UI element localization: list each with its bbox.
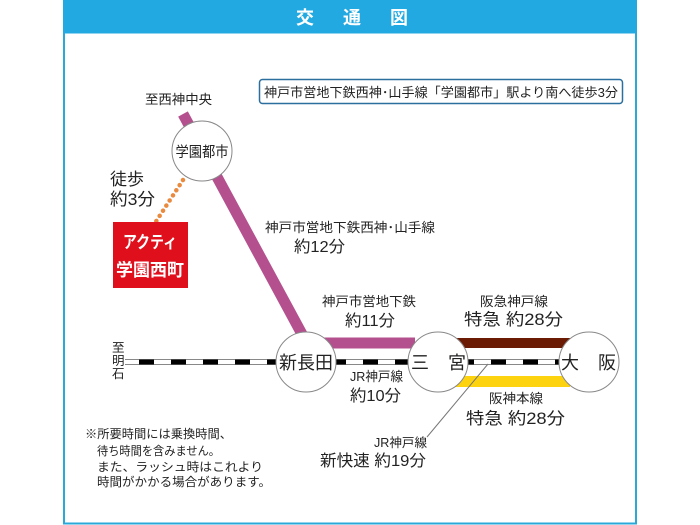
label: Seishin-Yamate 12 min <box>265 220 435 256</box>
label: Hanshin 28 min <box>466 391 566 428</box>
label: Hankyu 28 min: 特急 約28分 <box>464 310 564 329</box>
purple line: Seishin-Yamate <box>183 114 415 343</box>
label: JR rapid 19 min: JR神戸線 <box>374 435 427 450</box>
title: 交 通 図 <box>296 8 408 28</box>
station: Shin-Nagata <box>276 332 336 392</box>
label: to Akashi: 石 <box>112 367 125 381</box>
label: Hanshin 28 min: 特急 約28分 <box>466 409 566 428</box>
label: JR 10 min <box>350 369 403 405</box>
note: travel time disclaimer <box>85 427 271 489</box>
label: subway 11 min: 神戸市営地下鉄 <box>322 294 416 309</box>
station: Osaka: 大 <box>561 353 579 373</box>
label: Hankyu 28 min: 阪急神戸線 <box>480 294 548 309</box>
red box: Acty Gakuen-nishimachi: アクティ <box>123 233 177 252</box>
label: Seishin-Yamate 12 min: 神戸市営地下鉄西神･山手線 <box>265 220 435 235</box>
label: to Akashi: 至 <box>112 341 125 355</box>
label: Seishin-Yamate 12 min: 約12分 <box>294 238 345 256</box>
header bar <box>63 0 637 34</box>
walking route dotted <box>155 180 183 223</box>
label: subway 11 min: 約11分 <box>345 312 395 330</box>
label: walk 3 minutes <box>110 170 155 209</box>
label: to Seishin-chuo: 至西神中央 <box>145 92 212 107</box>
note: travel time disclaimer: 待ち時間を含みません。 <box>97 444 220 458</box>
label: walk 3 minutes: 徒歩 <box>110 170 144 189</box>
label: JR rapid 19 min <box>320 435 427 470</box>
station: Gakuen-toshi: 学園都市 <box>176 144 228 161</box>
label: JR 10 min: 約10分 <box>350 387 401 405</box>
callout: access summary: 神戸市営地下鉄西神･山手線「学園都市」駅より南へ徒歩3分 <box>264 85 618 100</box>
callout: access summary <box>260 80 622 104</box>
brown line: Hankyu Kobe <box>450 338 570 348</box>
yellow line: Hanshin <box>450 376 570 387</box>
label: to Akashi <box>112 341 125 381</box>
station: Shin-Nagata: 新長田 <box>279 353 333 373</box>
note: travel time disclaimer: 時間がかかる場合があります。 <box>97 474 271 489</box>
note: travel time disclaimer: また、ラッシュ時はこれより <box>97 460 263 474</box>
station: Gakuen-toshi <box>172 121 232 181</box>
station: Osaka: 阪 <box>598 353 616 373</box>
label: Hanshin 28 min: 阪神本線 <box>489 391 543 406</box>
red box: Acty Gakuen-nishimachi <box>113 222 188 288</box>
red box: Acty Gakuen-nishimachi: 学園西町 <box>116 260 184 280</box>
label: JR 10 min: JR神戸線 <box>350 369 403 384</box>
label: to Akashi: 明 <box>112 354 125 368</box>
note: travel time disclaimer: ※所要時間には乗換時間、 <box>85 427 232 441</box>
label: Hankyu 28 min <box>464 294 564 329</box>
label: subway 11 min <box>322 294 416 330</box>
station: Sannomiya: 三 <box>411 353 429 373</box>
connector: JR Shin-kaisoku <box>427 364 488 437</box>
station: Sannomiya: 宮 <box>448 353 466 373</box>
panel frame <box>64 20 636 524</box>
label: walk 3 minutes: 約3分 <box>110 190 155 209</box>
station: Sannomiya <box>408 332 468 392</box>
track: JR Kobe line <box>125 359 570 365</box>
station: Osaka <box>559 332 619 392</box>
label: JR rapid 19 min: 新快速 約19分 <box>320 452 426 470</box>
